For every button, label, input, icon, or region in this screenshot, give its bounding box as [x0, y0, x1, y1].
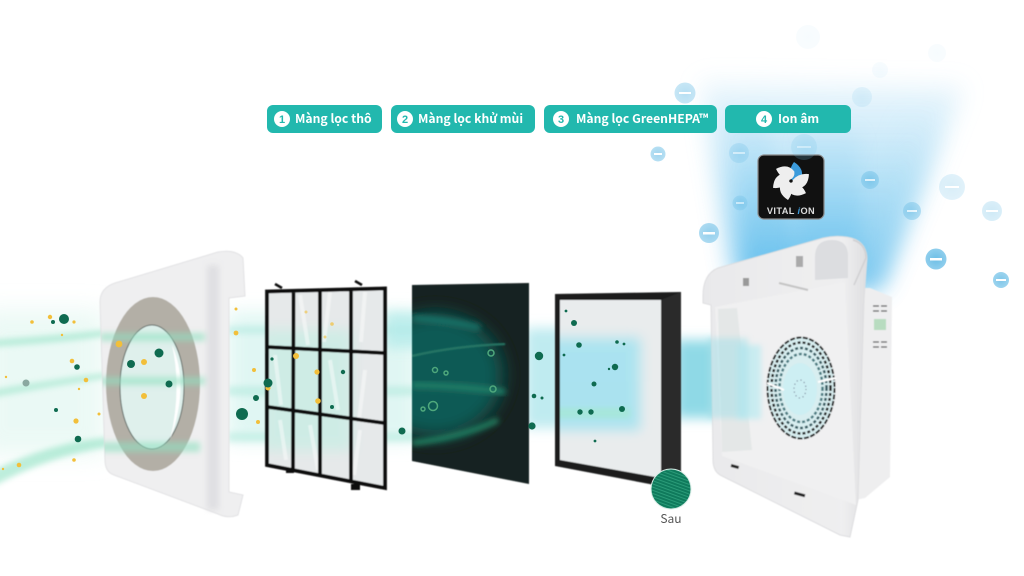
pill 3: 3 — [558, 114, 564, 126]
air purifier unit — [703, 236, 892, 537]
pill 4: Ion âm — [778, 109, 819, 127]
label: Sau: Sau — [660, 510, 682, 527]
pill 4: 4 — [761, 114, 768, 126]
pill 2: 2 — [402, 114, 408, 126]
filter pills — [267, 105, 851, 133]
ion airflow cone — [700, 80, 965, 290]
pill 4 — [725, 105, 851, 133]
Vital Ion logo: VITAL iON — [767, 206, 815, 216]
yellow dust particles — [2, 308, 334, 470]
pill 1: Màng lọc thô — [295, 109, 372, 127]
air stream left green — [0, 310, 110, 488]
front panel — [100, 251, 245, 517]
intake ring — [106, 297, 200, 471]
pill 3: Màng lọc GreenHEPA™ — [576, 109, 708, 127]
Vital Ion logo — [758, 155, 824, 219]
pill 1: 1 — [279, 114, 285, 126]
pill 2: Màng lọc khử mùi — [418, 109, 523, 127]
trapped particles in carbon filter — [421, 350, 496, 411]
negative ions — [650, 25, 1009, 288]
pill 1 — [267, 105, 382, 133]
air stream middle — [228, 312, 745, 442]
HEPA back close-up — [651, 469, 691, 527]
coarse filter — [262, 281, 386, 490]
pill 3 — [544, 105, 717, 133]
pill 2 — [391, 105, 535, 133]
fan grille — [767, 337, 836, 439]
green particles — [22, 310, 625, 442]
GreenHEPA filter — [540, 292, 681, 486]
deodorizing carbon filter — [411, 282, 530, 485]
